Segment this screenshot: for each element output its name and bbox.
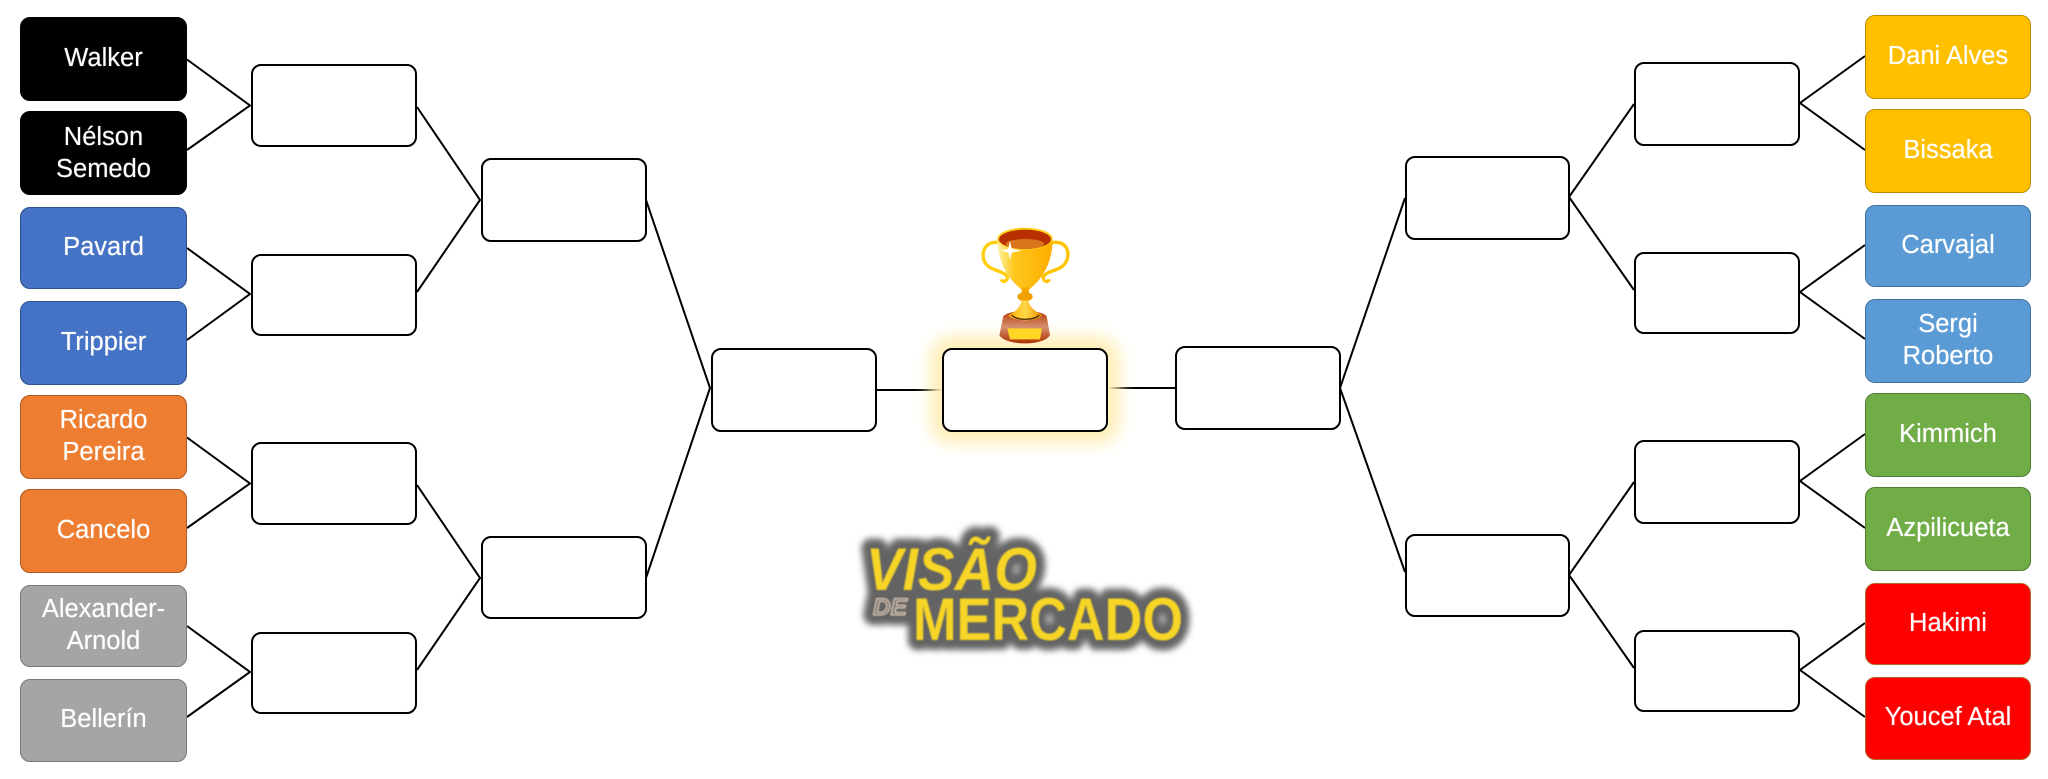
player: Ricardo Pereira — [20, 395, 187, 479]
player: Sergi Roberto — [1865, 299, 2031, 383]
logo lettering: VISÃO — [866, 536, 1037, 603]
player: Pavard: Pavard — [63, 232, 144, 260]
player: Hakimi: Hakimi — [1909, 608, 1987, 636]
player: Alexander-Arnold — [20, 585, 187, 667]
player: Bissaka: Bissaka — [1903, 136, 1993, 164]
empty slot: right round 1, top — [1634, 62, 1800, 146]
logo halo: DE — [873, 594, 908, 621]
logo halo — [866, 536, 1183, 653]
player: Sergi Roberto: Roberto — [1903, 342, 1993, 370]
player: Trippier: Trippier — [61, 328, 146, 356]
player: Carvajal: Carvajal — [1901, 230, 1995, 258]
player: Bellerín: Bellerín — [60, 705, 147, 733]
connector: left semi to final — [877, 389, 942, 391]
logo halo: MERCADO — [913, 586, 1183, 653]
empty slot: left round 2, bottom — [481, 536, 647, 619]
player: Walker — [20, 17, 187, 101]
player: Azpilicueta: Azpilicueta — [1886, 514, 2010, 542]
connectors: right quarter-finals — [1569, 104, 1634, 668]
player: Nélson Semedo — [20, 111, 187, 195]
icon: golden trophy — [981, 228, 1070, 344]
player: Youcef Atal: Youcef Atal — [1885, 703, 2011, 731]
connectors: left round of 16 — [187, 60, 250, 717]
player: Kimmich: Kimmich — [1899, 420, 1997, 448]
empty slot: left round 2, top — [481, 158, 647, 242]
empty slot: left round 1, bottom — [251, 632, 417, 714]
empty slot: left round 1, top — [251, 64, 417, 147]
player: Pavard — [20, 207, 187, 289]
connectors: right semi-finals — [1340, 198, 1405, 572]
player: Nélson Semedo: Nélson — [64, 123, 143, 151]
player: Alexander-Arnold: Alexander- — [42, 594, 165, 622]
player: Youcef Atal — [1865, 677, 2031, 760]
player: Nélson Semedo: Semedo — [56, 155, 151, 183]
logo lettering — [866, 536, 1183, 653]
logo halo: VISÃO — [866, 536, 1037, 603]
player: Bellerín — [20, 679, 187, 762]
player: Azpilicueta — [1865, 487, 2031, 571]
player: Ricardo Pereira: Pereira — [62, 438, 145, 466]
empty slot: right semi-final — [1175, 346, 1341, 430]
player: Dani Alves: Dani Alves — [1888, 42, 2008, 70]
player: Carvajal — [1865, 205, 2031, 287]
connectors: left semi-finals — [646, 200, 710, 578]
player: Walker: Walker — [64, 44, 143, 72]
empty slot: right round 2, bottom — [1405, 534, 1570, 617]
player: Kimmich — [1865, 393, 2031, 477]
player: Hakimi — [1865, 583, 2031, 665]
player: Ricardo Pereira: Ricardo — [60, 406, 147, 434]
connectors: right round of 16 — [1800, 56, 1865, 717]
empty slot: left semi-final — [711, 348, 877, 432]
logo lettering: MERCADO — [913, 586, 1183, 653]
connectors: left quarter-finals — [417, 107, 480, 670]
player: Cancelo — [20, 489, 187, 573]
player: Bissaka — [1865, 109, 2031, 193]
empty slot: left round 1, second — [251, 254, 417, 336]
empty slot: left round 1, third — [251, 442, 417, 525]
empty slot: right round 1, second — [1634, 252, 1800, 334]
logo lettering: DE — [873, 594, 908, 621]
empty slot: right round 1, third — [1634, 440, 1800, 524]
empty slot: right round 1, bottom — [1634, 630, 1800, 712]
empty slot: final with golden glow — [942, 348, 1108, 432]
player: Sergi Roberto: Sergi — [1918, 310, 1978, 338]
connector: final to right semi — [1110, 387, 1176, 389]
player: Cancelo: Cancelo — [57, 516, 150, 544]
player: Alexander-Arnold: Arnold — [67, 626, 140, 654]
player: Trippier — [20, 301, 187, 385]
empty slot: right round 2, top — [1405, 156, 1570, 240]
player: Dani Alves — [1865, 15, 2031, 99]
